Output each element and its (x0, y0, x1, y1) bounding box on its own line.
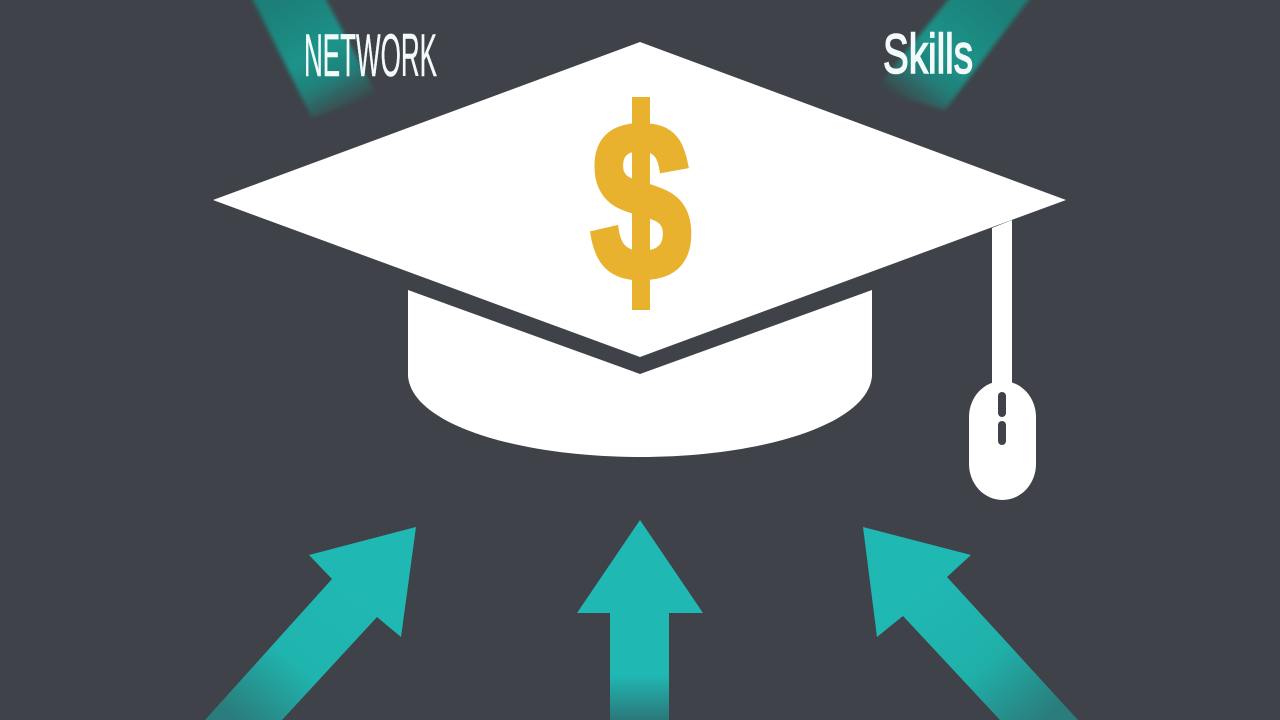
arrow: center (577, 520, 703, 720)
cap base (408, 290, 872, 457)
arrow: left (205, 527, 416, 720)
mouse lower slot (998, 421, 1006, 445)
dollar sign (591, 77, 691, 328)
streak: top right (875, 0, 1033, 110)
cap board (213, 42, 1066, 357)
icon: tassel mouse (969, 220, 1036, 500)
mouse upper slot (998, 392, 1006, 417)
dollar glyph: $ (591, 77, 691, 328)
dollar vertical bar (632, 97, 650, 310)
arrow: right (863, 527, 1078, 720)
tassel cord (992, 220, 1012, 390)
label: skills: Skills (883, 22, 973, 85)
icon: graduation cap (213, 42, 1066, 457)
mouse body (969, 381, 1036, 500)
streak: top left (250, 0, 377, 118)
infographic canvas: NETWORK (304, 22, 437, 89)
